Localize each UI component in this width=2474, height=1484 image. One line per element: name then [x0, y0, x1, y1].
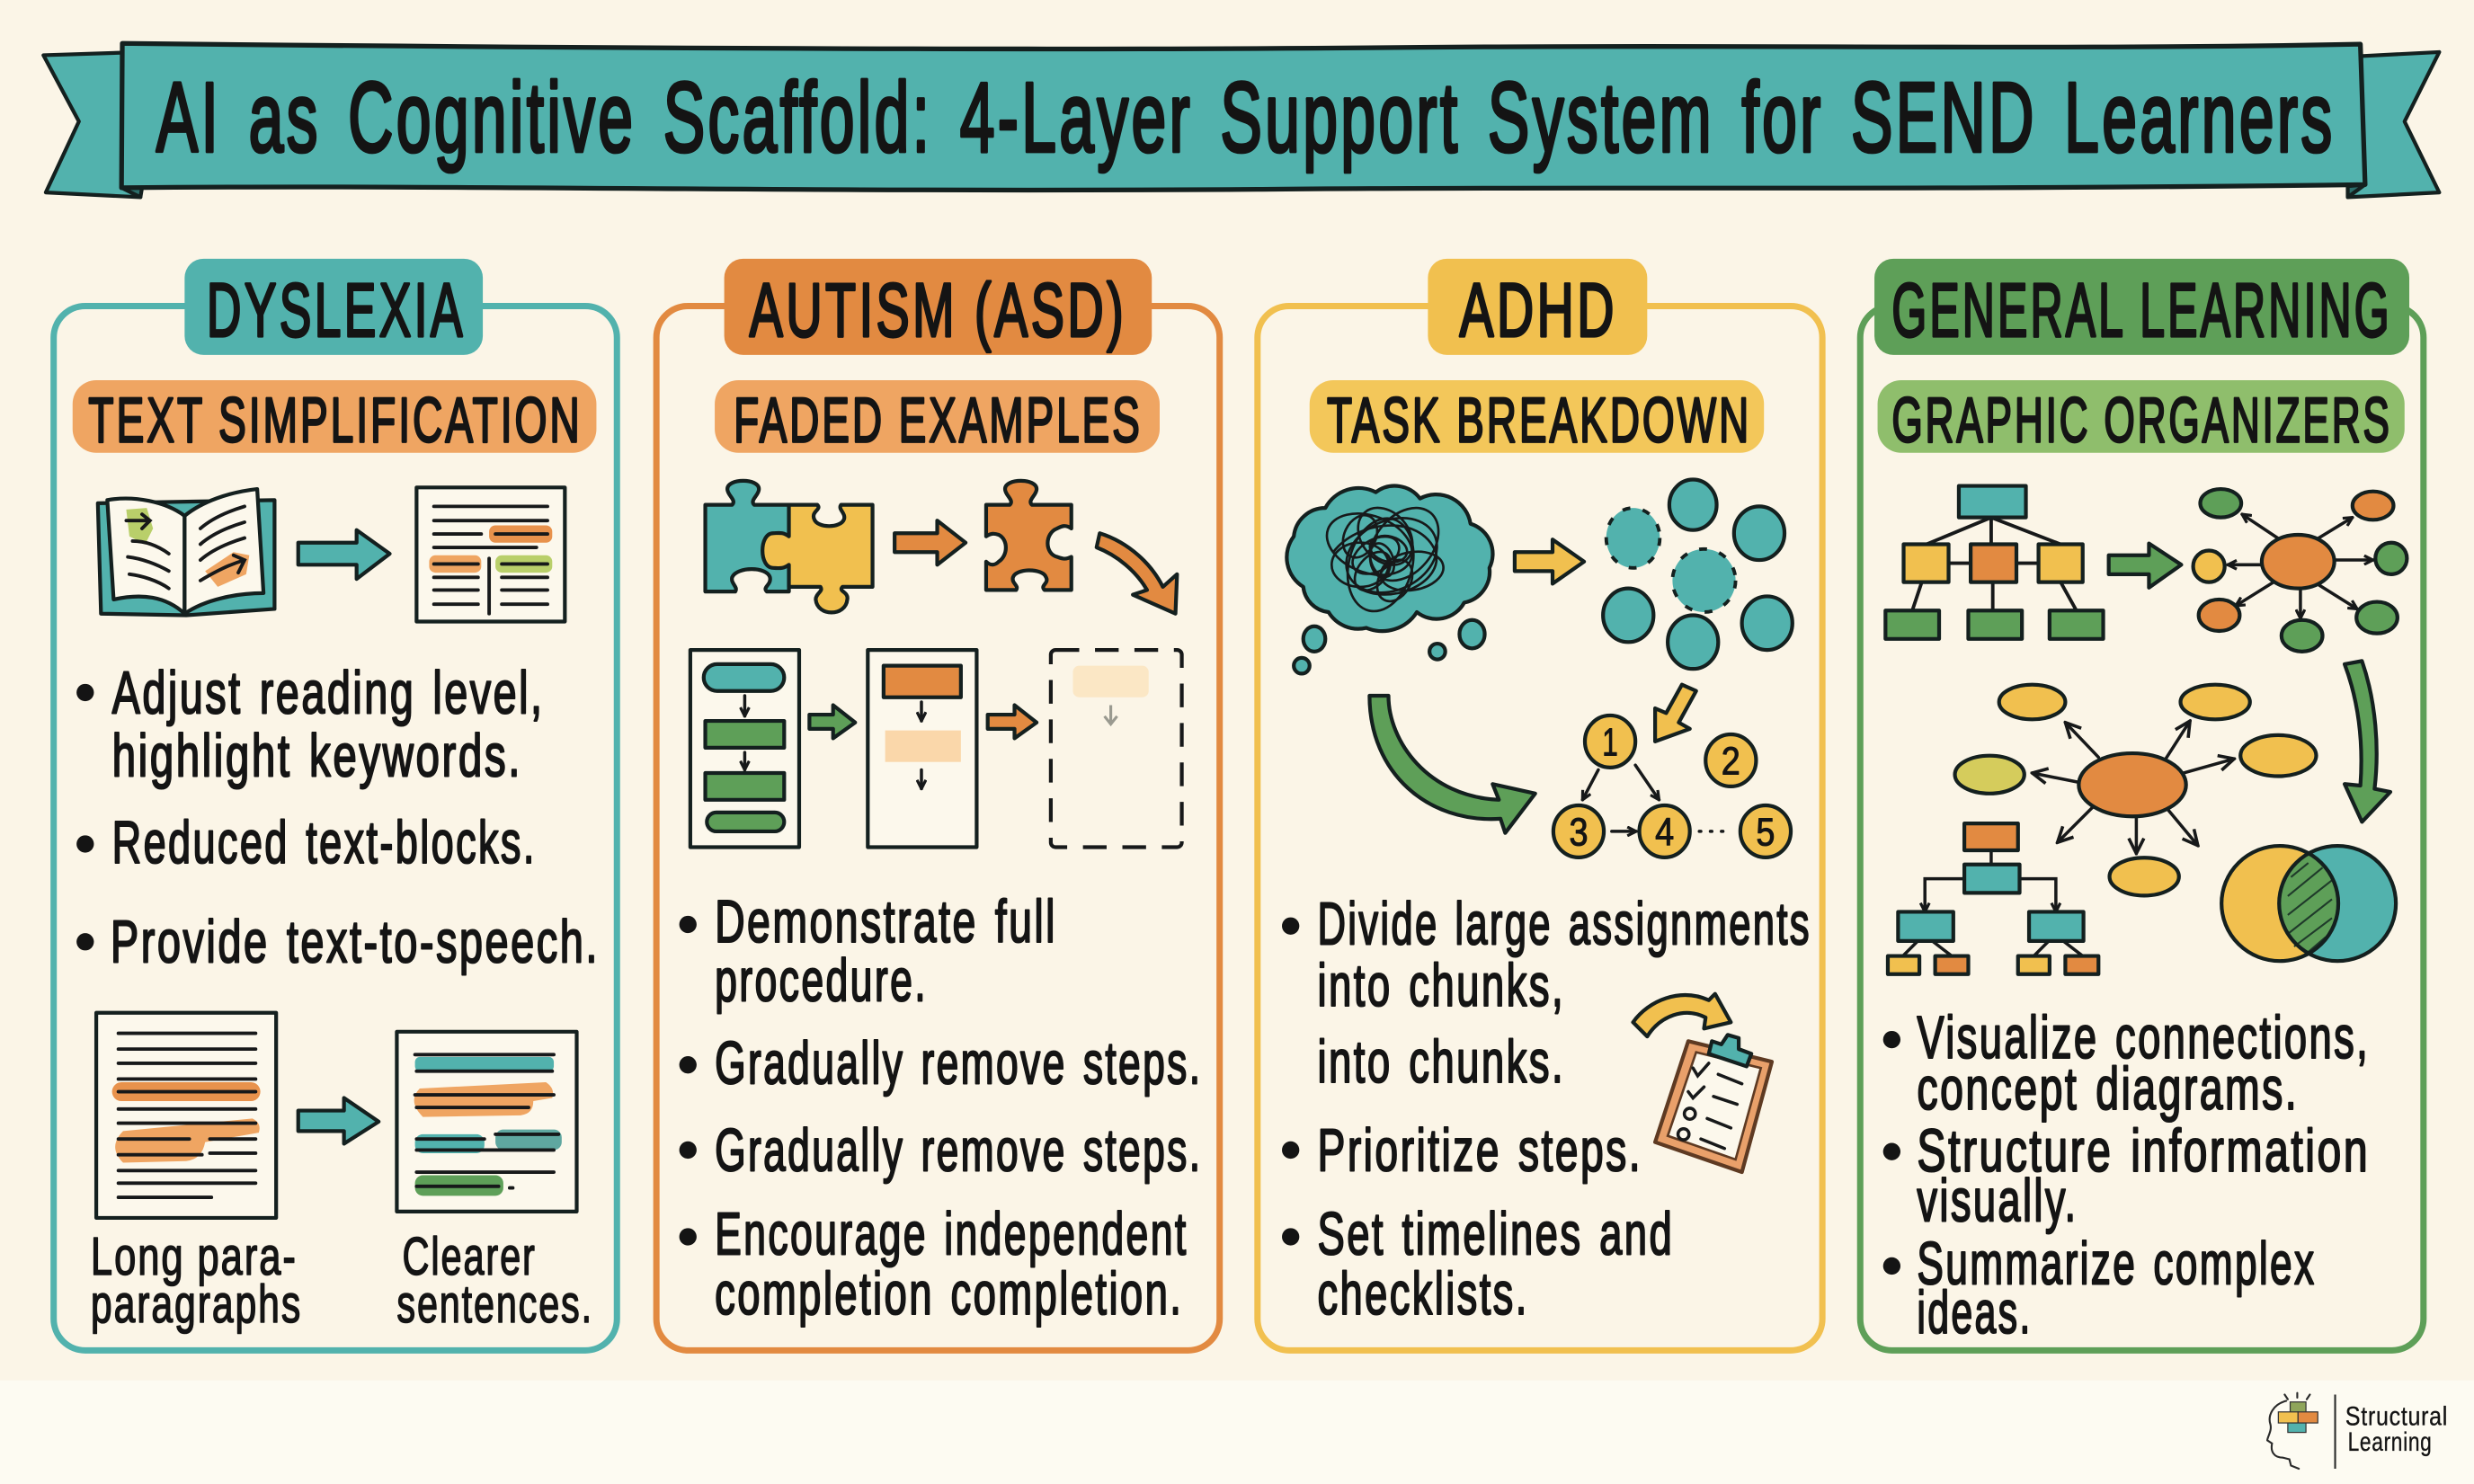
icon: tangled thought cloud [1286, 486, 1492, 673]
text: dyslexia bullets: Provide text-to-speech. [111, 910, 600, 976]
icon: numbered steps: 5 [1756, 811, 1775, 855]
arrow [988, 706, 1037, 738]
icon: simplified document [416, 487, 565, 621]
icon: venn diagram [2221, 846, 2396, 961]
flow card: partial steps [868, 650, 976, 847]
text: autism bullets: Demonstrate full [715, 889, 1057, 955]
caption: long paragraphs: Long para- [91, 1226, 298, 1286]
heading: dyslexia: DYSLEXIA [207, 268, 466, 352]
arrow: down to steps [1655, 685, 1696, 742]
logo: structural learning: Structural [2345, 1402, 2448, 1432]
text: dyslexia bullets [76, 660, 600, 976]
caption: long paragraphs [91, 1226, 302, 1334]
icon: mind map [1955, 685, 2316, 895]
arrow [1515, 539, 1584, 583]
icon: numbered steps: 4 [1655, 811, 1674, 855]
arrow: curved green [1369, 696, 1535, 833]
caption: clearer sentences [396, 1226, 593, 1334]
text: autism bullets: Encourage independent [715, 1201, 1188, 1267]
heading: autism: AUTISM (ASD) [750, 268, 1126, 352]
text: adhd bullets: checklists. [1318, 1261, 1529, 1328]
title banner [43, 43, 2439, 197]
arrow [298, 1098, 378, 1143]
text: general learning bullets: concept diagrams. [1917, 1056, 2299, 1123]
text: general learning bullets: ideas. [1917, 1280, 2033, 1346]
text: adhd bullets: into chunks. [1318, 1029, 1565, 1096]
text: adhd bullets: Prioritize steps. [1318, 1117, 1642, 1184]
arrow [2109, 544, 2181, 588]
heading: adhd: ADHD [1459, 268, 1617, 352]
icon: radial concept map [2194, 489, 2407, 652]
text: adhd bullets: Set timelines and [1318, 1201, 1674, 1267]
icon: open book [98, 489, 274, 615]
text: autism bullets: completion completion. [715, 1261, 1183, 1328]
panel: general learning [1860, 259, 2424, 1350]
text: dyslexia bullets: Adjust reading level, [112, 660, 545, 726]
subheading: text simplification [73, 380, 596, 455]
heading: dyslexia [184, 259, 483, 355]
icon: numbered steps: 3 [1569, 811, 1589, 855]
caption: long paragraphs: paragraphs [91, 1274, 302, 1334]
icon: joined puzzle pieces [706, 481, 873, 612]
heading: adhd [1428, 259, 1647, 355]
icon: single puzzle piece [986, 481, 1072, 590]
icon: separated circles [1603, 480, 1793, 669]
flow card: faded steps [1051, 650, 1182, 847]
text: autism bullets [680, 889, 1202, 1328]
arrow [298, 530, 390, 579]
text: autism bullets: Gradually remove steps. [715, 1117, 1202, 1184]
text: adhd bullets [1282, 891, 1811, 1328]
subheading: faded examples: FADED EXAMPLES [734, 384, 1143, 455]
icon: numbered steps [1553, 715, 1791, 858]
subheading: task breakdown [1310, 380, 1764, 455]
icon: numbered steps: 1 [1602, 721, 1618, 765]
arrow: curved [1097, 533, 1177, 614]
logo: structural learning: Learning [2348, 1427, 2432, 1457]
text: dyslexia bullets: Reduced text-blocks. [112, 810, 537, 876]
subheading: faded examples [715, 380, 1160, 455]
caption: clearer sentences: Clearer [403, 1226, 537, 1286]
flow card: full steps [690, 650, 799, 847]
subheading: task breakdown: TASK BREAKDOWN [1327, 384, 1751, 455]
text: general learning bullets: visually. [1917, 1168, 2078, 1234]
heading: autism [725, 259, 1152, 355]
icon: small tree diagram [1888, 823, 2098, 974]
text: adhd bullets: into chunks, [1318, 953, 1565, 1019]
text: general learning bullets [1883, 1005, 2370, 1346]
text: autism bullets: procedure. [715, 948, 928, 1015]
arrow [894, 520, 966, 564]
panel: autism [656, 259, 1220, 1350]
text: adhd bullets: Divide large assignments [1318, 891, 1811, 957]
icon: curved arrow to clipboard [1633, 994, 1731, 1036]
subheading: text simplification: TEXT SIMPLIFICATION [88, 384, 583, 455]
panel: adhd [1258, 259, 1822, 1350]
arrow: curved green [2345, 661, 2390, 822]
icon: hierarchy chart [1885, 486, 2104, 639]
icon: long paragraph document [96, 1013, 276, 1218]
panel: dyslexia [54, 259, 617, 1350]
icon: numbered steps: 2 [1722, 740, 1740, 784]
icon: clearer sentences document [396, 1032, 577, 1212]
icon: clipboard checklist [1655, 1035, 1772, 1172]
arrow [809, 706, 855, 738]
caption: clearer sentences: sentences. [396, 1274, 593, 1334]
text: autism bullets: Gradually remove steps. [715, 1031, 1202, 1097]
text: dyslexia bullets: highlight keywords. [112, 723, 522, 789]
logo: structural learning [2267, 1393, 2448, 1469]
